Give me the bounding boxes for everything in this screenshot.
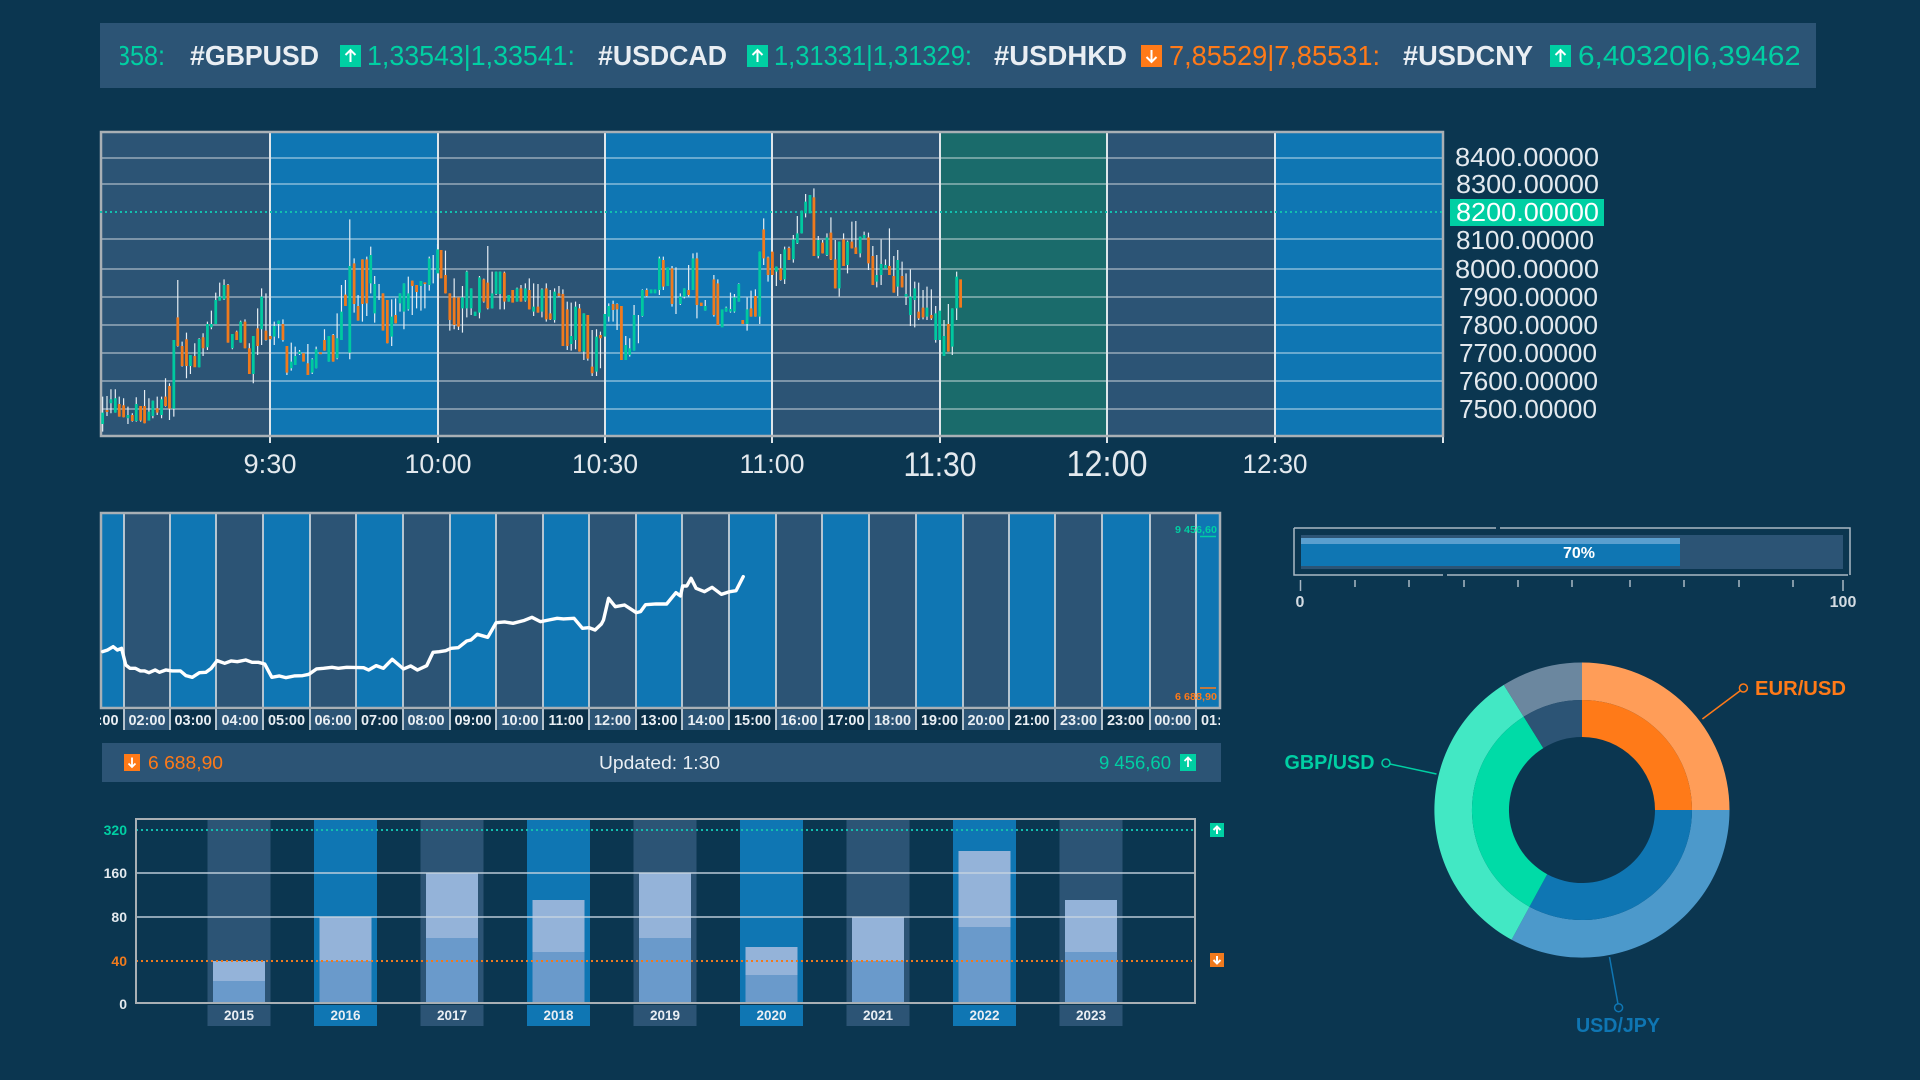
y axis labels: 80 [111,909,127,925]
hour labels: 18:00 [874,713,911,729]
hour labels: 08:00 [408,713,444,729]
year labels: 2015 [224,1008,255,1023]
time axis: 11:30 [904,446,976,484]
hour labels: 17:00 [828,713,864,729]
time axis: 12:00 [1066,443,1148,484]
line chart panel [82,513,1238,730]
y axis labels: 160 [104,865,127,881]
year labels: 2018 [543,1008,574,1023]
price line [103,577,743,678]
icon: high limit up arrow [1210,823,1224,837]
icon: low limit down arrow [1210,953,1224,967]
progress gauge: 0 [1296,594,1305,611]
ticker bar: 358: [116,40,165,71]
hour labels: 14:00 [688,713,724,729]
price axis: 7800.00000 [1459,310,1598,340]
price axis: 7900.00000 [1459,282,1598,312]
progress gauge [1294,528,1856,611]
hour labels: 21:00 [1014,713,1050,729]
status bar: 6 688,90 [148,752,223,773]
candlestick chart panel [100,132,1604,484]
time axis: 12:30 [1242,449,1308,479]
price axis: 7700.00000 [1459,338,1597,368]
label: USD/JPY [1576,957,1661,1037]
chart high value: 9 456,60 [1175,524,1217,536]
label: EUR/USD [1702,678,1846,719]
time axis: 11:00 [740,449,804,479]
time axis: 10:30 [572,449,638,479]
hour labels: 05:00 [268,713,305,729]
year labels: 2017 [437,1008,467,1023]
year labels: 2020 [756,1008,787,1023]
hour labels: 15:00 [734,713,771,729]
hour labels: 23:00 [1107,713,1144,729]
year labels: 2022 [969,1008,1000,1023]
ticker bar: #USDCAD [598,40,727,71]
label: USD/JPY: USD/JPY [1576,1015,1661,1037]
y axis labels: 320 [104,822,127,838]
price axis: 8100.00000 [1456,225,1594,255]
column bands [208,819,1122,1003]
price axis: 8300.00000 [1456,169,1599,199]
hour labels [82,513,1238,730]
hour labels: 11:00 [548,713,584,729]
hour labels: 04:00 [222,713,258,729]
time axis: 10:00 [404,449,472,479]
ticker bar [100,23,1816,88]
hour labels: 07:00 [361,713,398,729]
hour labels: 01:00 [1201,713,1238,729]
hour labels: 01:00 [82,713,118,729]
label: EUR/USD: EUR/USD [1755,678,1846,700]
status bar: 9 456,60 [1099,752,1171,773]
progress gauge: 100 [1830,594,1856,611]
chart low value: 6 688,90 [1175,691,1217,703]
stacked bars [213,851,1117,1003]
price axis: 7600.00000 [1459,366,1598,396]
hour labels: 02:00 [128,713,166,729]
year labels: 2021 [863,1008,894,1023]
label: GBP/USD [1284,752,1436,774]
y axis labels: 40 [111,953,127,969]
donut chart [1434,662,1730,958]
candlesticks [103,188,961,432]
label: GBP/USD: GBP/USD [1284,752,1374,774]
year labels: 2019 [650,1008,680,1023]
price axis: 7500.00000 [1459,394,1597,424]
ticker bar: #GBPUSD [190,40,319,71]
status bar: Updated: 1:30 [599,752,720,773]
year labels [208,1005,1122,1026]
ticker bar: 1,31331|1,31329: [774,40,972,71]
price axis: 8400.00000 [1455,142,1599,172]
time axis: 9:30 [244,449,296,479]
price axis [1450,142,1604,424]
hour labels: 23:00 [1060,713,1097,729]
ticker bar: 1,33543|1,33541: [367,40,575,71]
ticker bar: 7,85529|7,85531: [1169,40,1380,71]
time axis [244,443,1308,484]
hour labels: 03:00 [174,713,212,729]
hour labels: 20:00 [968,713,1004,729]
hour labels: 19:00 [921,713,958,729]
y axis labels [104,822,127,1012]
price axis: 8000.00000 [1455,254,1599,284]
hour labels: 13:00 [640,713,678,729]
hour labels: 09:00 [454,713,492,729]
year labels: 2023 [1076,1008,1107,1023]
progress gauge: 70% [1563,545,1595,562]
bar chart panel [104,819,1224,1026]
y axis labels: 0 [119,996,127,1012]
hour labels: 00:00 [1154,713,1191,729]
ticker bar: 6,40320|6,39462 [1578,40,1801,71]
hour labels: 06:00 [314,713,352,729]
year labels: 2016 [330,1008,361,1023]
price axis: 8200.00000 [1456,197,1599,227]
ticker bar: #USDCNY [1403,40,1533,71]
hour labels: 10:00 [502,713,538,729]
hour labels: 16:00 [780,713,818,729]
status bar [102,743,1221,782]
hour labels: 12:00 [594,713,631,729]
ticker bar: #USDHKD [994,40,1127,71]
